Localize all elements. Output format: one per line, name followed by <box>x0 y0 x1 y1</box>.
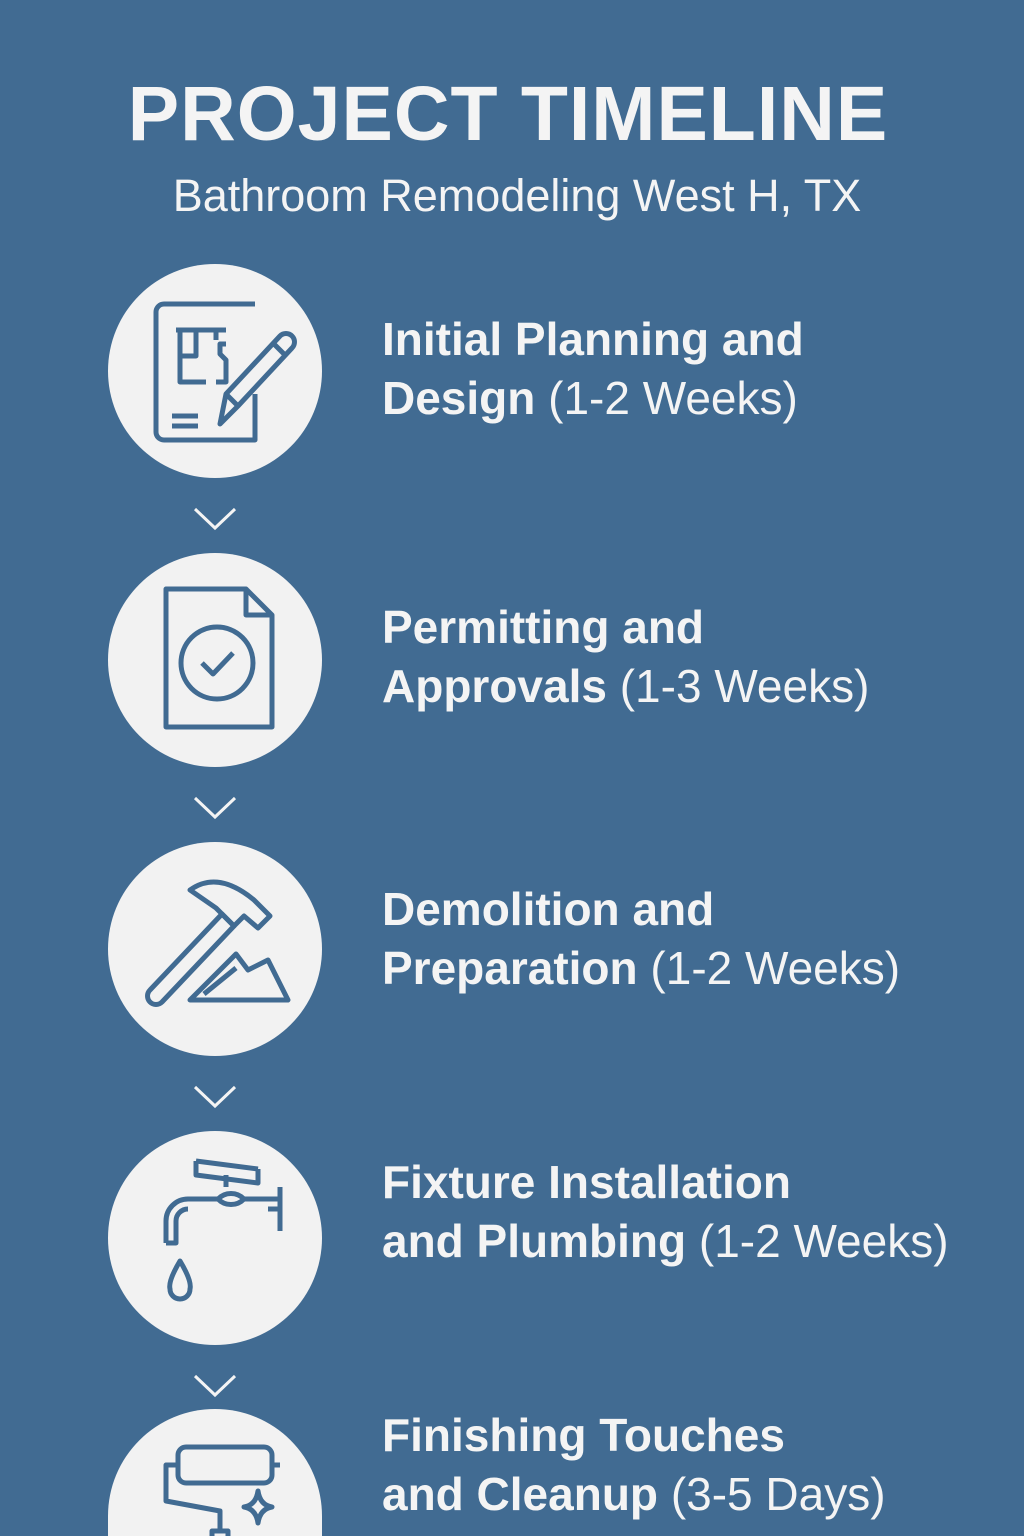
step 3 text <box>382 883 900 994</box>
step 2 text <box>382 601 869 712</box>
step 5 text: and Cleanup (3-5 Days) <box>382 1468 886 1520</box>
step 1 text: Design (1-2 Weeks) <box>382 372 798 424</box>
arrow 1 <box>194 508 236 530</box>
step 2 text: Permitting and <box>382 601 704 653</box>
step 4 text: and Plumbing (1-2 Weeks) <box>382 1215 949 1267</box>
step 5 text <box>382 1409 886 1520</box>
title: PROJECT TIMELINE <box>128 71 888 157</box>
arrow 2 <box>194 796 236 819</box>
step 3 text: Demolition and <box>382 883 714 935</box>
step 2 text: Approvals (1-3 Weeks) <box>382 660 869 712</box>
step 3 text: Preparation (1-2 Weeks) <box>382 942 900 994</box>
icon: faucet <box>108 1131 322 1345</box>
step 1 text <box>382 313 804 424</box>
arrow 3 <box>194 1086 236 1108</box>
icon: permit <box>108 553 322 767</box>
step 4 text <box>382 1156 949 1267</box>
step 1 text: Initial Planning and <box>382 313 804 365</box>
icon: planning <box>108 264 322 478</box>
step 4 text: Fixture Installation <box>382 1156 791 1208</box>
subtitle: Bathroom Remodeling West H, TX <box>173 170 861 221</box>
icon: hammer <box>108 842 322 1056</box>
arrow 4 <box>194 1374 236 1397</box>
icon: paint roller <box>108 1409 322 1536</box>
step 5 text: Finishing Touches <box>382 1409 785 1461</box>
